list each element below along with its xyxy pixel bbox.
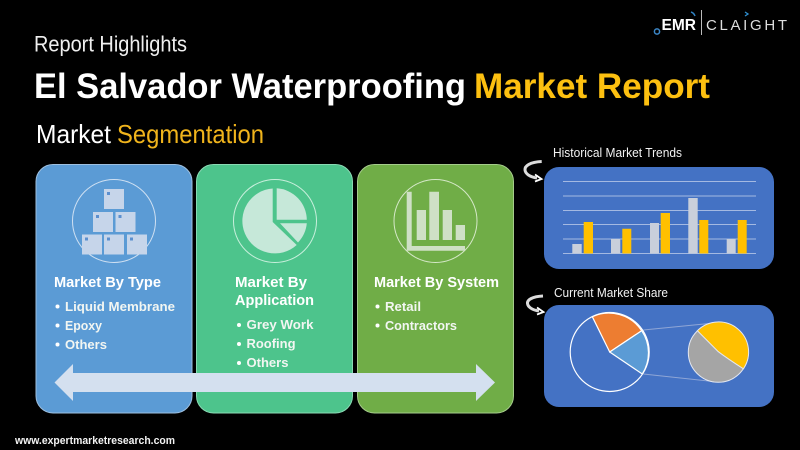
list: type items <box>56 299 175 352</box>
list: system items: Contractors <box>385 318 457 333</box>
list: type items: Liquid Membrane <box>65 299 175 314</box>
arrow: double-headed horizontal <box>54 364 495 401</box>
bars: gold series <box>584 213 747 254</box>
panel: market by type <box>36 164 192 413</box>
logo: EMR Claight: CLAIGHT <box>706 17 787 34</box>
panel: market by application <box>196 164 352 413</box>
icon: curved arrow share <box>527 296 544 314</box>
heading: market by application: Market By <box>235 274 308 291</box>
website url: www.expertmarketresearch.com <box>14 435 175 447</box>
label: historical market trends: Historical Market Trends <box>553 146 682 160</box>
list: system items: Retail <box>385 299 421 314</box>
panel: market by system <box>358 164 514 413</box>
section heading: market segmentation <box>36 119 264 149</box>
main pie <box>570 312 649 392</box>
heading: market by system: Market By System <box>374 274 499 291</box>
logo: EMR Claight: EMR <box>662 17 696 34</box>
list: system items <box>376 299 457 333</box>
title <box>34 67 710 106</box>
icon: stacked boxes <box>72 180 156 262</box>
label: current market share: Current Market Share <box>554 286 668 300</box>
list: application items <box>237 317 314 370</box>
panel: market share pie chart <box>544 305 774 407</box>
title: El Salvador Waterproofing <box>34 67 466 106</box>
heading: market by type: Market By Type <box>54 274 161 291</box>
heading: market by application <box>235 274 314 309</box>
report highlights label: Report Highlights <box>34 32 187 56</box>
bars: grey series <box>572 198 736 254</box>
title: Market Report <box>474 67 710 106</box>
logo: EMR Claight <box>654 10 787 35</box>
list: application items: Roofing <box>246 336 296 351</box>
list: type items: Others <box>65 337 107 352</box>
panel: historical bar chart <box>544 167 774 269</box>
section heading: market segmentation: Segmentation <box>117 119 264 149</box>
pie of pie connector lines <box>643 323 715 382</box>
secondary pie <box>688 322 749 382</box>
list: application items: Grey Work <box>246 317 314 332</box>
list: application items: Others <box>246 355 288 370</box>
heading: market by application: Application <box>235 292 314 309</box>
list: type items: Epoxy <box>65 318 103 333</box>
section heading: market segmentation: Market <box>36 119 112 149</box>
icon: curved arrow trends <box>525 162 542 182</box>
icon: pie chart <box>234 180 316 262</box>
icon: bar chart <box>394 180 477 262</box>
